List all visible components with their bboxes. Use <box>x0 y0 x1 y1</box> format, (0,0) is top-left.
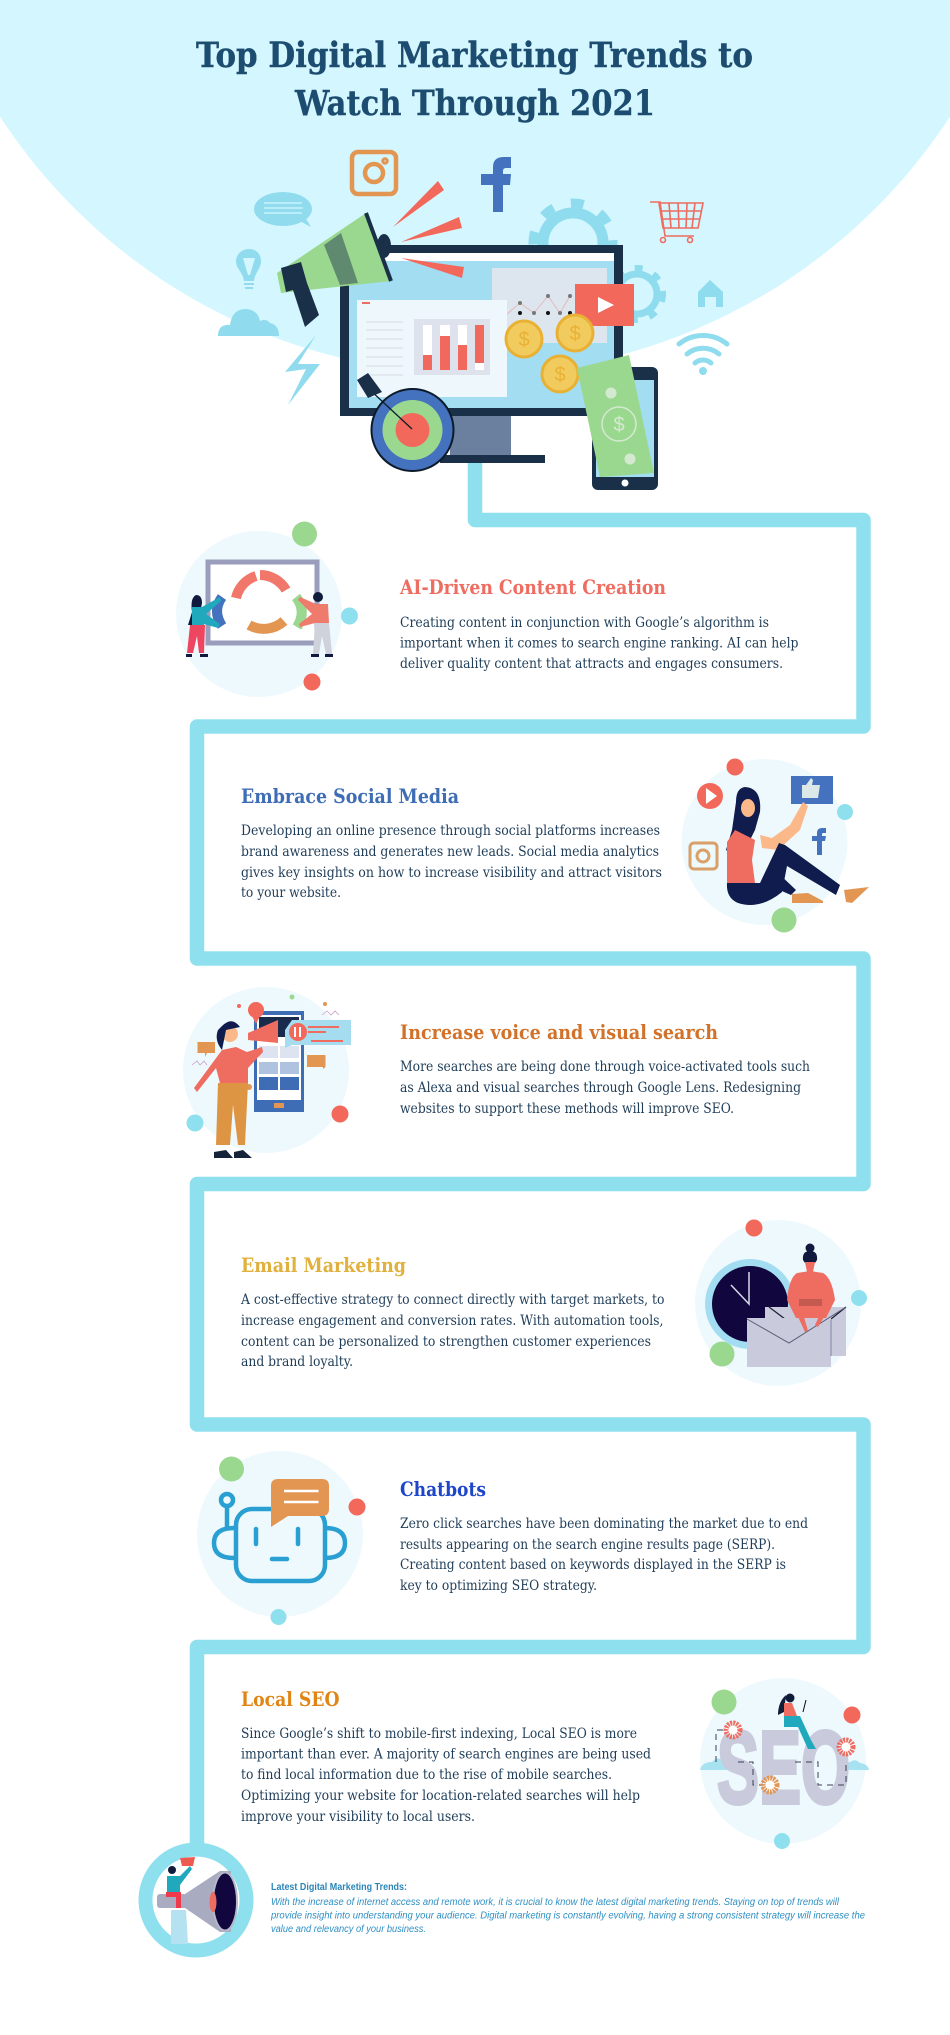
title: Watch Through 2021 <box>294 83 655 124</box>
footer heading: Latest Digital Marketing Trends: <box>271 1882 407 1893</box>
footer badge: megaphone <box>146 1850 246 1950</box>
icon: lightning <box>285 335 320 405</box>
footer body <box>270 1897 865 1935</box>
illustration: woman with social icons <box>682 758 869 932</box>
heading: Local SEO <box>241 1687 340 1711</box>
body text: increase engagement and conversion rates. With automation tools, <box>241 1313 664 1329</box>
icon: facebook <box>481 157 511 212</box>
icon: shopping cart <box>650 202 703 242</box>
illustration: woman with phone <box>183 987 351 1158</box>
bar chart panel <box>357 300 507 397</box>
body text: More searches are being done through voice-activated tools such <box>400 1059 810 1075</box>
icon: instagram <box>352 152 396 194</box>
hero illustration <box>218 152 727 490</box>
body text <box>241 1726 651 1825</box>
icon: coins: $ <box>518 329 530 351</box>
body text <box>400 1516 808 1594</box>
icon: house <box>698 280 723 307</box>
title <box>196 35 753 124</box>
body text <box>240 1292 664 1370</box>
monitor <box>340 245 623 463</box>
body text <box>241 823 662 901</box>
section 6: local SEO <box>241 1678 869 1849</box>
section 3: voice and visual search <box>183 987 810 1158</box>
heading: Embrace Social Media <box>241 784 459 808</box>
body text: to find local information due to the rise of mobile searches. <box>241 1767 612 1783</box>
body text: Since Google’s shift to mobile-first indexing, Local SEO is more <box>241 1726 637 1742</box>
title: Top Digital Marketing Trends to <box>196 35 753 76</box>
path connector <box>197 463 864 1860</box>
illustration: clock and envelope <box>695 1220 867 1386</box>
icon: light bulb <box>236 249 261 288</box>
body text: important when it comes to search engine ranking. AI can help <box>400 636 799 652</box>
heading: AI-Driven Content Creation <box>399 575 666 599</box>
tablet <box>592 367 658 490</box>
body text: and brand loyalty. <box>241 1354 353 1370</box>
body text: Zero click searches have been dominating the market due to end <box>400 1516 808 1532</box>
heading: Increase voice and visual search <box>400 1020 718 1044</box>
target with arrow <box>357 373 454 471</box>
megaphone rays <box>393 181 464 278</box>
body text <box>400 1059 810 1117</box>
body text: results appearing on the search engine results page (SERP). <box>400 1537 775 1553</box>
body text: deliver quality content that attracts and engages consumers. <box>400 656 783 672</box>
body text: Developing an online presence through social platforms increases <box>241 823 660 839</box>
body text: key to optimizing SEO strategy. <box>400 1578 597 1594</box>
body text: important than ever. A majority of search engines are being used <box>241 1746 651 1762</box>
banknote <box>577 355 654 477</box>
body text: Creating content based on keywords displayed in the SERP is <box>400 1557 786 1573</box>
footer body: provide insight into understanding your audience. Digital marketing is constantly evolving, having a strong consistent strategy will increase the <box>270 1910 865 1922</box>
body text: content can be personalized to strengthen customer experiences <box>241 1334 651 1350</box>
body text <box>400 615 799 672</box>
illustration: SEO letters <box>700 1678 869 1849</box>
illustration: robot with speech bubble <box>197 1451 366 1625</box>
body text: as Alexa and visual searches through Google Lens. Redesigning <box>400 1080 801 1096</box>
heading: Email Marketing <box>241 1253 406 1277</box>
footer body: With the increase of internet access and remote work, it is crucial to know the latest digital marketing trends. Staying on top of trends will <box>271 1897 840 1908</box>
icon: wifi <box>679 335 727 373</box>
background dome <box>0 0 950 374</box>
section 1: AI-driven content <box>176 522 799 697</box>
megaphone <box>277 213 391 327</box>
icon: chat bubble <box>254 192 312 227</box>
body text: improve your visibility to local users. <box>241 1809 475 1825</box>
icon: coins: $ <box>554 364 566 386</box>
body text: Optimizing your website for location-related searches will help <box>241 1788 640 1804</box>
illustration: SEO letters: SEO <box>717 1710 850 1825</box>
icon: coins: $ <box>569 323 581 345</box>
body text: gives key insights on how to increase visibility and attract visitors <box>241 865 662 881</box>
section 2: social media <box>241 758 869 932</box>
section 4: email marketing <box>240 1220 867 1386</box>
body text: brand awareness and generates new leads. Social media analytics <box>241 844 659 860</box>
footer text <box>270 1882 865 1935</box>
footer body: value and relevancy of your business. <box>271 1924 426 1935</box>
line chart panel <box>492 268 607 343</box>
icon: large gear <box>533 203 613 283</box>
icon: cloud <box>218 309 279 336</box>
section 5: chatbots <box>197 1451 808 1625</box>
icon: small gear <box>611 268 663 320</box>
heading: Chatbots <box>400 1477 486 1501</box>
body text: A cost-effective strategy to connect directly with target markets, to <box>240 1292 664 1308</box>
banknote: $ <box>613 414 625 436</box>
body text: Creating content in conjunction with Google’s algorithm is <box>400 615 769 631</box>
icon: coins <box>506 315 593 392</box>
illustration: content circle <box>176 522 358 697</box>
body text: to your website. <box>241 885 341 901</box>
body text: websites to support these methods will improve SEO. <box>400 1101 734 1117</box>
icon: video play <box>575 284 634 326</box>
